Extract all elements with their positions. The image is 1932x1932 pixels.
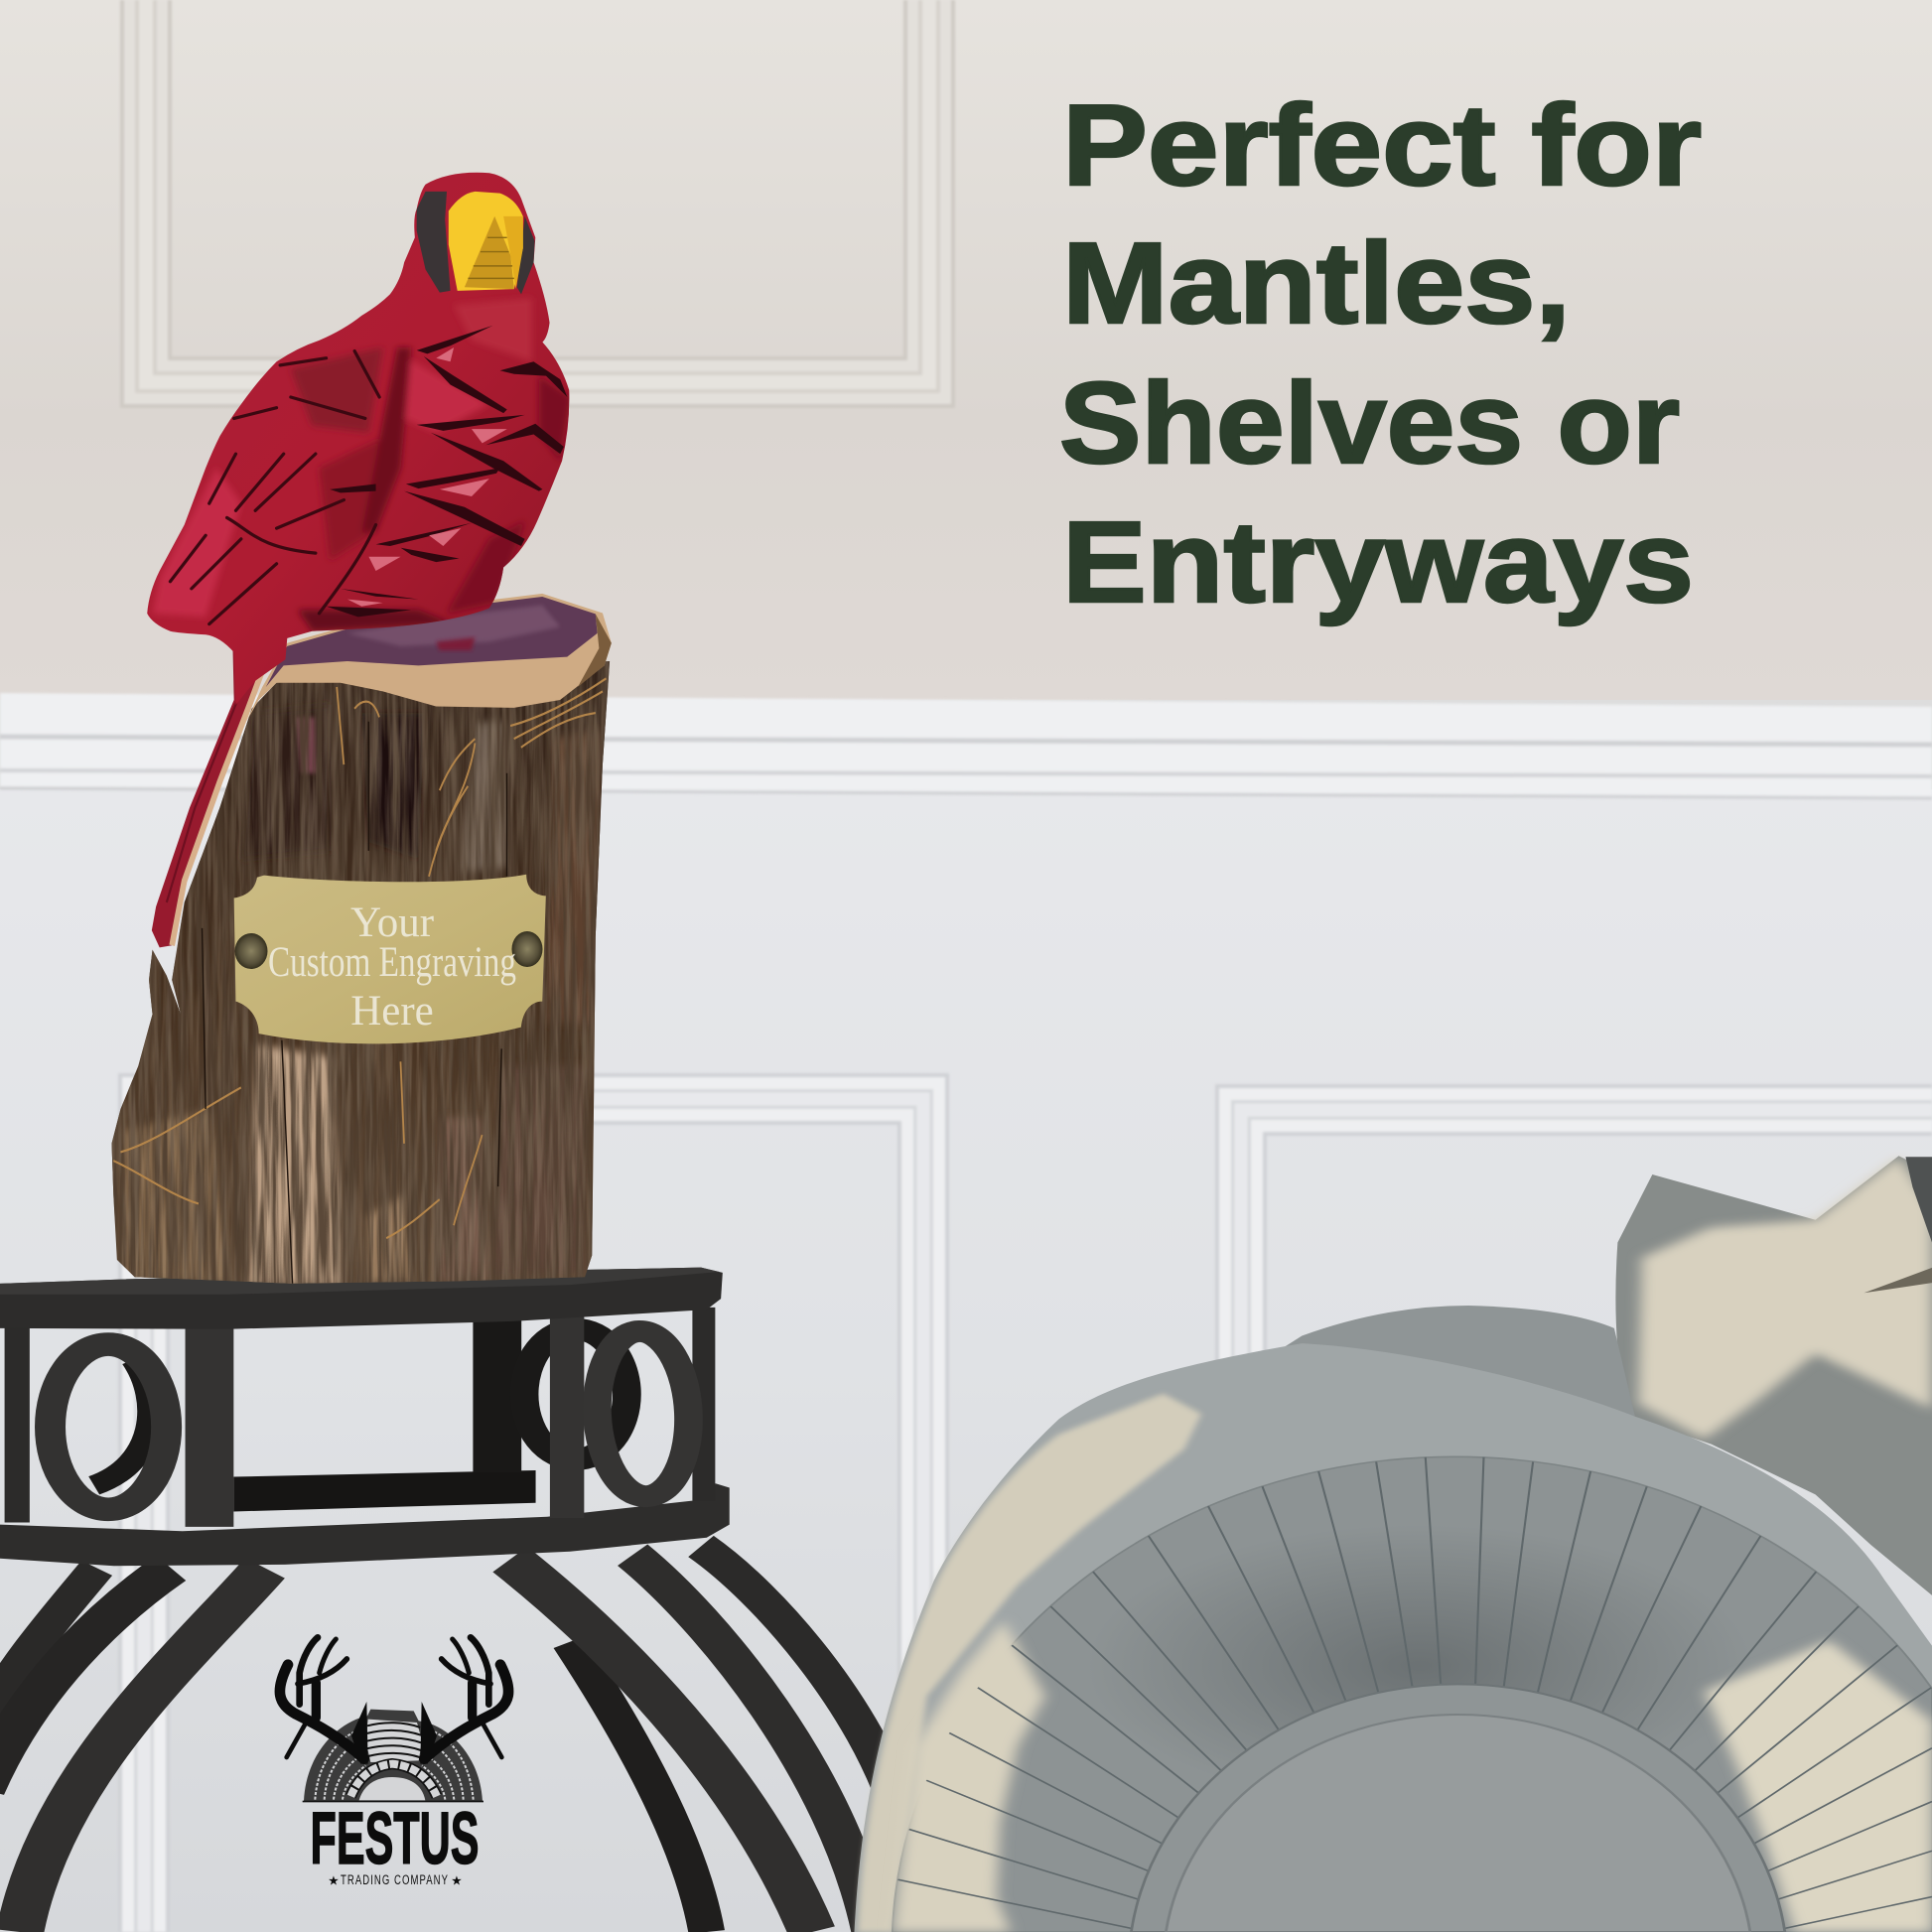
pleat seams <box>898 1457 1932 1929</box>
wood grain <box>111 661 610 1284</box>
stand legs <box>0 1547 900 1932</box>
center button <box>1131 1684 1785 1932</box>
plaque engraving: Custom Engraving <box>268 939 516 986</box>
lower wall panel right <box>1241 1110 1932 1588</box>
title: Perfect for <box>1062 80 1702 209</box>
eye mask <box>417 192 535 294</box>
title: Shelves or <box>1059 358 1680 487</box>
rear rings <box>94 1329 626 1485</box>
fibre strands <box>113 678 607 1238</box>
plaque rivets <box>234 931 542 969</box>
plaque engraving <box>268 899 516 1035</box>
pleated panel <box>893 1456 1932 1932</box>
back bar and posts <box>233 1470 536 1511</box>
antlers <box>280 1637 368 1764</box>
upper wall panel molding <box>146 0 929 382</box>
turkey fan <box>303 1710 483 1802</box>
wood colour patches <box>124 704 599 1286</box>
chair rail <box>0 693 1932 798</box>
pleat shadow <box>1087 1525 1753 1807</box>
brass plaque <box>234 875 546 1043</box>
front rings <box>51 1344 167 1509</box>
beak <box>449 192 523 291</box>
top band <box>0 1268 723 1329</box>
festus logo <box>280 1637 508 1802</box>
logo wordmark: FESTUS <box>310 1797 479 1879</box>
logo wordmark: ★ <box>452 1875 462 1887</box>
stump top <box>246 594 612 722</box>
stump <box>99 594 616 1311</box>
logo wordmark: ★ <box>329 1875 339 1887</box>
arm body <box>854 1343 1932 1932</box>
tail feathers <box>152 622 285 947</box>
title: Mantles, <box>1062 218 1571 347</box>
logo wordmark <box>310 1797 479 1887</box>
pillow <box>1615 1156 1932 1595</box>
lower band <box>0 1483 730 1566</box>
sunlit arm <box>858 1394 1201 1932</box>
lower wall <box>0 789 1932 1932</box>
posts <box>186 1324 233 1527</box>
plaque engraving: Here <box>350 988 434 1035</box>
red shading <box>153 298 571 631</box>
vertical cracks <box>203 722 507 1284</box>
wing lines <box>170 351 379 624</box>
logo wordmark: TRADING COMPANY <box>341 1872 449 1887</box>
sofa arm <box>854 1156 1932 1932</box>
arm back cushion <box>1274 1306 1635 1417</box>
bird body <box>147 173 569 705</box>
glossy highlights <box>347 347 507 607</box>
plaque engraving: Your <box>350 899 434 946</box>
pleat highlights <box>893 1620 1932 1932</box>
upper wall <box>0 0 1932 700</box>
carved feather cuts <box>327 326 567 617</box>
title: Entryways <box>1062 497 1694 626</box>
iron plant stand <box>0 1268 900 1932</box>
bark <box>111 661 610 1284</box>
cardinal carving <box>147 173 571 705</box>
lower wall panel left <box>144 1099 923 1932</box>
title <box>1059 80 1702 626</box>
